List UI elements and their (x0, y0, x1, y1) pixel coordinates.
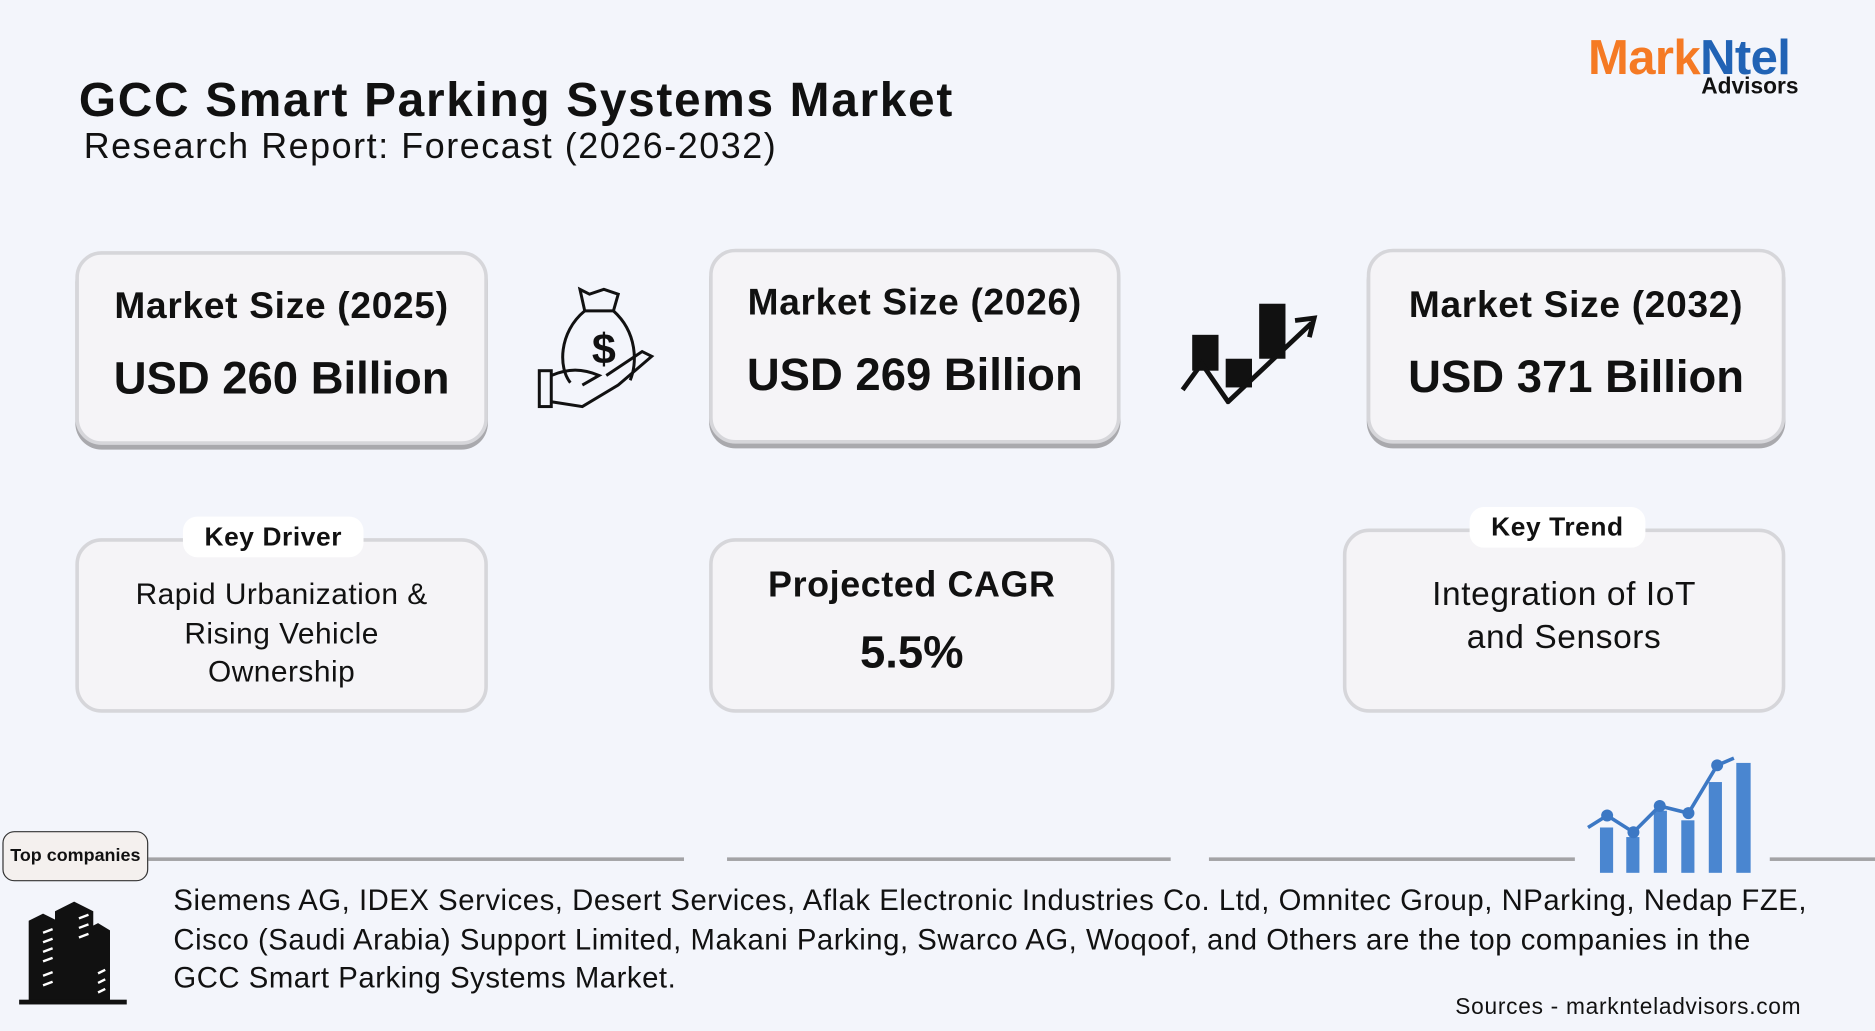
logo: Advisors (1701, 74, 1798, 99)
panel: key trend: and Sensors (1467, 618, 1661, 655)
card: market size 2026: Market Size (2026) (748, 281, 1082, 323)
title: GCC Smart Parking Systems Market (79, 74, 954, 127)
panel: key trend (1343, 529, 1785, 713)
panel: key driver: Rapid Urbanization & (136, 578, 428, 611)
icon: buildings (19, 902, 127, 1004)
card: market size 2026 (709, 249, 1120, 444)
panel: projected CAGR: Projected CAGR (768, 566, 1056, 605)
card: market size 2032: Market Size (2032) (1409, 283, 1743, 325)
panel: key driver (75, 538, 488, 713)
card: market size 2025: Market Size (2025) (114, 285, 449, 326)
icon: blue bar chart (1587, 756, 1751, 873)
tag: key trend (1470, 507, 1645, 548)
logo: MarkNtel (1588, 30, 1790, 85)
subtitle: Research Report: Forecast (2026-2032) (84, 127, 777, 166)
text: top companies list: Siemens AG, IDEX Services, Desert Services, Aflak Electronic Industries Co. Ltd, Omnitec Group, NParking, Nedap FZE, (173, 885, 1807, 917)
card: market size 2032: USD 371 Billion (1408, 353, 1744, 403)
text: top companies list (173, 885, 1807, 995)
text: top companies list: GCC Smart Parking Systems Market. (173, 963, 676, 995)
tag: top companies (2, 831, 148, 881)
panel: key driver: Ownership (208, 655, 355, 689)
icon: money bag in hand (538, 286, 654, 408)
text: top companies list: Cisco (Saudi Arabia) Support Limited, Makani Parking, Swarco AG, Woqoof, and Others are the top companies in the (173, 924, 1751, 956)
card: market size 2025 (75, 251, 488, 445)
card: market size 2026: USD 269 Billion (747, 350, 1083, 401)
card: market size 2032 (1367, 249, 1785, 444)
panel: projected CAGR (709, 538, 1114, 713)
tag: key driver: Key Driver (204, 521, 342, 551)
tag: key trend: Key Trend (1491, 512, 1624, 542)
card: market size 2025: USD 260 Billion (114, 354, 450, 404)
tag: top companies: Top companies (10, 845, 140, 866)
icon: growth chart arrow (1180, 304, 1318, 404)
panel: key trend: Integration of IoT (1432, 575, 1696, 612)
source: Sources - marknteladvisors.com (1455, 995, 1801, 1020)
panel: key driver: Rising Vehicle (184, 616, 379, 650)
panel: projected CAGR: 5.5% (860, 628, 964, 678)
tag: key driver (183, 517, 364, 557)
icon: money bag in hand: $ (592, 326, 616, 374)
